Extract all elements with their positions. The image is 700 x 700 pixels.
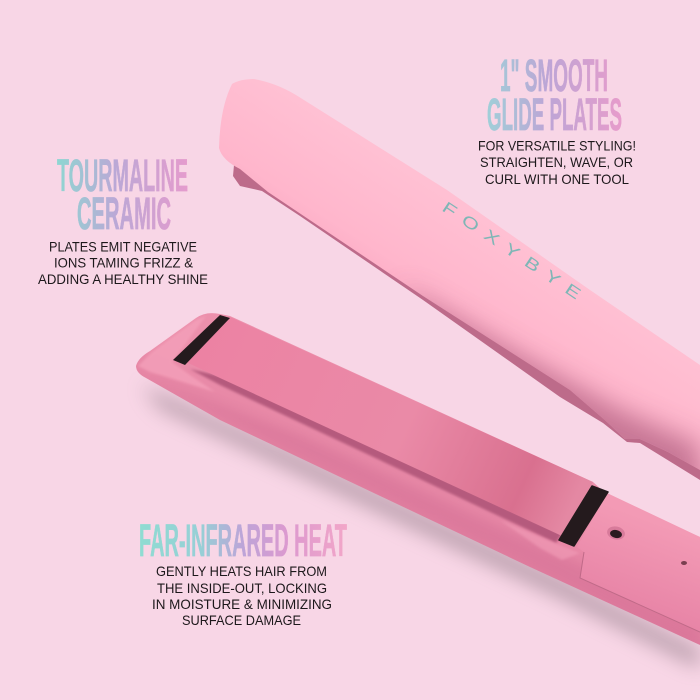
flat iron: lower arm <box>136 313 700 650</box>
callout: tourmaline ceramic: TOURMALINE <box>57 150 188 201</box>
upper arm underside band <box>233 160 700 480</box>
recess lip by right strip <box>500 520 580 560</box>
description <box>478 138 636 187</box>
description: THE INSIDE-OUT, LOCKING <box>157 581 327 596</box>
upper arm shaded lower edge <box>410 286 700 470</box>
description <box>152 564 332 628</box>
shadow under lower iron <box>142 385 700 668</box>
brand logo: FOXYBYE <box>439 198 584 303</box>
description: GENTLY HEATS HAIR FROM <box>156 564 327 579</box>
description: CURL WITH ONE TOOL <box>485 172 629 187</box>
plate recess shadow <box>190 369 562 543</box>
indicator light <box>681 561 687 565</box>
right black strip <box>559 486 608 546</box>
description: FOR VERSATILE STYLING! <box>478 138 636 154</box>
callout: tourmaline ceramic <box>38 150 208 287</box>
lower arm side shading <box>256 423 690 640</box>
heading <box>487 50 622 140</box>
description: STRAIGHTEN, WAVE, OR <box>480 155 633 170</box>
description: IN MOISTURE & MINIMIZING <box>152 597 332 612</box>
text: FAR-INFRARED HEAT <box>139 515 347 566</box>
adjustment hole <box>606 525 626 541</box>
description: ADDING A HEALTHY SHINE <box>38 272 208 287</box>
lower arm end section <box>577 493 700 632</box>
description: IONS TAMING FRIZZ & <box>54 256 193 270</box>
description: SURFACE DAMAGE <box>182 613 301 628</box>
heading <box>57 150 188 239</box>
upper arm body <box>219 79 700 470</box>
description <box>38 240 208 287</box>
callout: smooth glide plates <box>478 50 636 187</box>
flat iron: upper arm <box>219 79 700 510</box>
lower arm tip highlight <box>138 316 215 392</box>
description: PLATES EMIT NEGATIVE <box>49 240 197 254</box>
heading: CERAMIC <box>77 188 171 239</box>
lower arm body <box>136 313 700 645</box>
heating plate <box>186 317 593 536</box>
left black strip <box>173 315 230 365</box>
callout: far-infrared heat <box>139 515 347 628</box>
